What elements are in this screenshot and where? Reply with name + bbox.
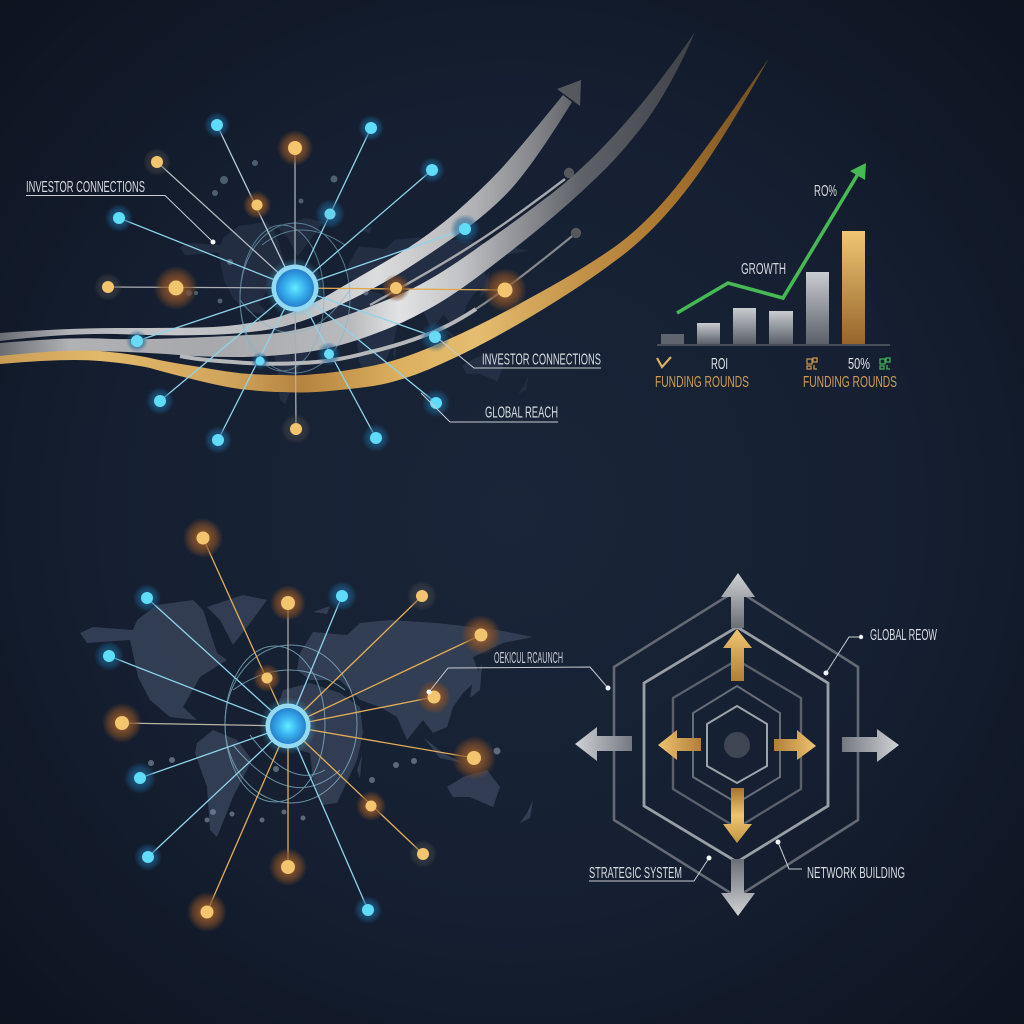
chart label: 50%: 50% [848,356,870,373]
concentric hexagons [614,590,858,897]
label: network building: NETWORK BUILDING [807,865,905,882]
label: global reow [824,627,938,676]
arrow: silver right [842,729,899,762]
icon: gold small glyph [807,358,817,369]
ribbon: thin silver line to upper dot [370,168,574,305]
label: global reach: GLOBAL REACH [485,404,558,422]
spokes [108,125,505,440]
strategic hexagon system [575,573,899,916]
label: investor connections left [26,179,216,244]
central hub [265,258,325,318]
chart label: RO%: RO% [814,183,837,200]
ribbon: upper silver with arrowhead [0,80,581,341]
arrow: silver down [721,859,755,916]
ribbon: thin silver lower with dot [180,228,581,364]
arrow: silver left [575,727,632,761]
nodes [94,518,501,932]
flowing growth ribbons [0,32,769,392]
green growth arrow [677,163,866,313]
globe wireframe [240,223,350,373]
arrow: gold left [658,730,701,760]
label: strategic system: STRATEGIC SYSTEM [589,865,682,882]
chart label: ROI: ROI [711,356,728,373]
icon: green small glyph [880,358,890,369]
arrow: silver up [721,573,755,628]
arrow: gold down [723,788,752,843]
chart label: growth: GROWTH [741,261,786,278]
small network dots [148,748,500,822]
nodes [94,112,527,454]
label: global reach [421,393,558,422]
axis [657,344,890,346]
label: oekicul rcaunch [426,650,610,694]
chart label: funding rounds left: FUNDING ROUNDS [655,374,749,391]
network: bottom hub and spokes [94,518,501,932]
world map: bottom network [80,595,533,837]
ribbon: wide silver sweeping to top right [0,32,695,357]
world map: top network [180,218,528,404]
globe wireframe [225,645,357,803]
small network dots [186,160,368,304]
bars [661,231,865,344]
label: investor connections right [440,340,601,368]
hexagon core dot [724,732,750,758]
chart label: funding rounds right: FUNDING ROUNDS [803,374,897,391]
spokes [109,538,481,912]
label: network building [776,840,905,882]
label: investor connections left: INVESTOR CONNECTIONS [26,179,145,196]
growth chart panel [655,163,897,391]
arrow: gold right [774,730,816,760]
ribbon: gold [0,58,769,392]
label: global reow: GLOBAL REOW [870,627,938,644]
icon: check mark [657,357,671,367]
arrow: gold up [723,629,752,681]
label: oekicul rcaunch: OEKICUL RCAUNCH [494,650,563,667]
label: strategic system [589,856,712,882]
central hub [259,697,317,755]
label: investor connections right: INVESTOR CONNECTIONS [482,352,601,368]
network: top hub and spokes [94,112,527,454]
